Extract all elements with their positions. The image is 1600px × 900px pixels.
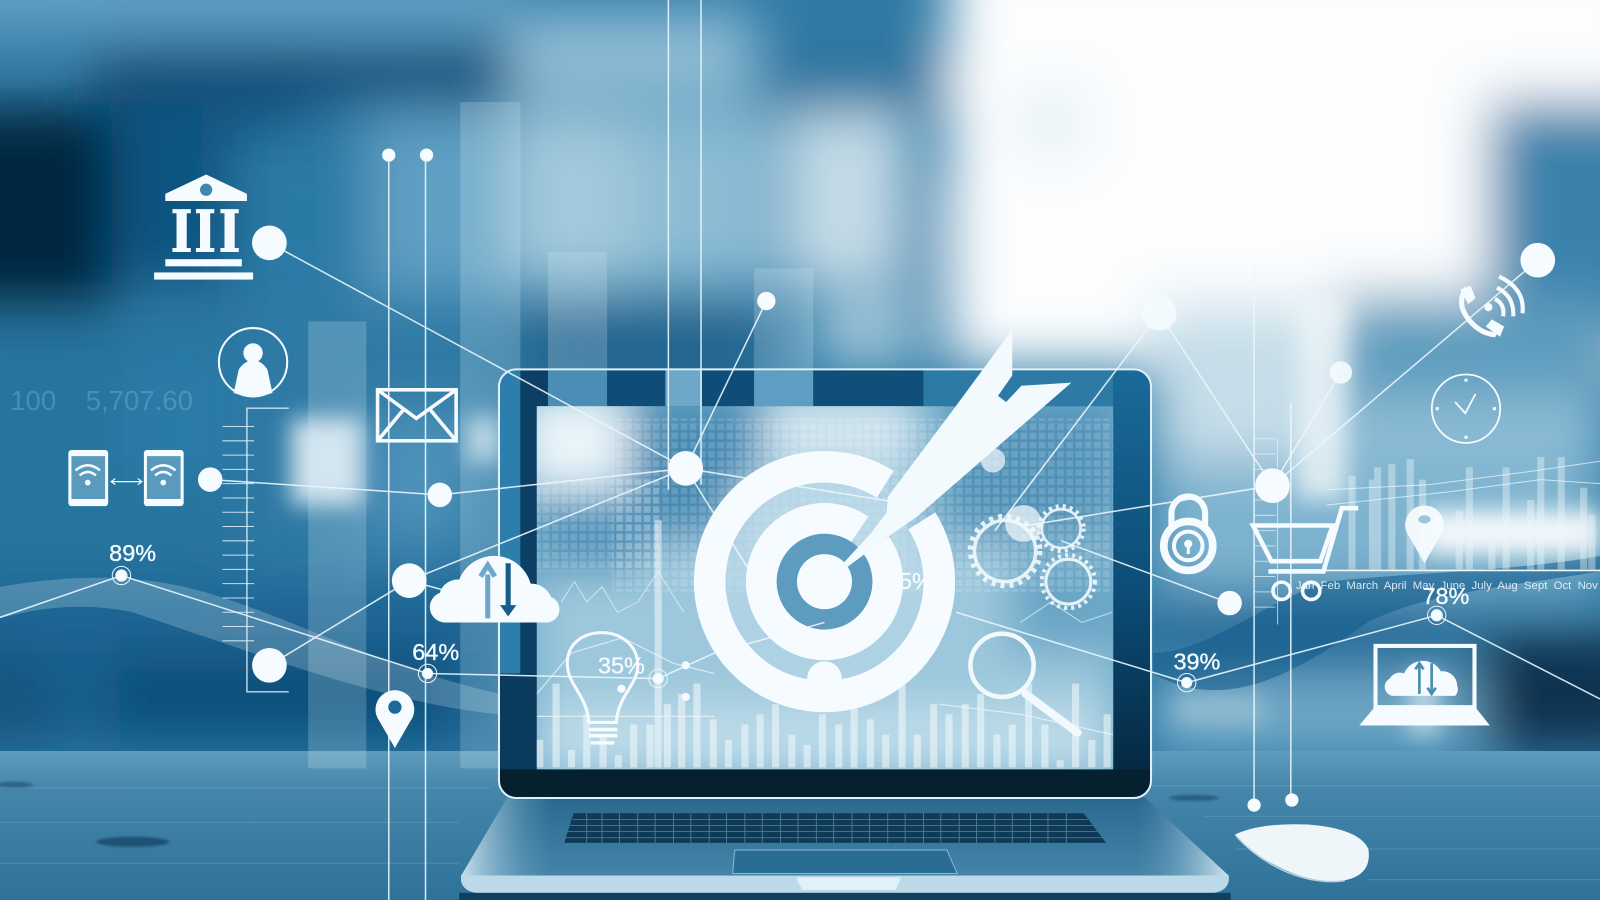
icon: map pin left (376, 690, 414, 748)
icon: cloud transfer (430, 556, 559, 622)
screen line charts (561, 571, 1112, 622)
percent labels: 35% (598, 652, 645, 678)
keyboard (564, 813, 1106, 843)
icon: magnifier (970, 634, 1078, 733)
faint ticker numbers: 5,707.60 (86, 385, 193, 416)
laptop notch (796, 878, 901, 890)
laptop lid and bezel (499, 369, 1151, 798)
target gap shading (726, 483, 923, 681)
percent labels: 64% (412, 639, 459, 665)
ruler scale left (222, 408, 289, 692)
screen bar chart (540, 520, 1107, 767)
icon: shopping cart (1253, 508, 1358, 599)
wave band (0, 556, 1600, 714)
faint ticker numbers: 100 (10, 385, 56, 416)
laptop base (459, 796, 1231, 900)
mouse (1235, 824, 1369, 882)
percent labels (109, 540, 1470, 678)
laptop screen (520, 393, 1113, 776)
icon: bank (154, 174, 253, 280)
icon: laptop with cloud (1359, 646, 1490, 726)
icon: connected phones (68, 450, 184, 506)
percent labels: 5% (899, 568, 933, 594)
right bar chart (1323, 457, 1600, 570)
icon: gears (970, 506, 1095, 608)
faint ticker numbers (10, 385, 193, 416)
percent marker rings (112, 566, 1446, 692)
target rings (710, 467, 939, 696)
dart arrow (823, 330, 1071, 585)
trackpad (733, 850, 957, 873)
right ruler scale (1254, 439, 1278, 624)
icon: envelope (378, 390, 456, 441)
percent labels: 89% (109, 540, 156, 566)
percent labels: 39% (1173, 648, 1221, 674)
wooden desk (0, 751, 1600, 900)
icon: clock (1432, 374, 1500, 443)
node dots (198, 148, 1555, 812)
icon: phone with signal (1460, 277, 1523, 337)
translucent background bars (308, 102, 813, 768)
icon: light bulb (567, 633, 638, 743)
month axis labels: Jan Feb March April May June July Aug Sept Oct Nov (1296, 580, 1598, 592)
percent labels: 78% (1422, 583, 1470, 609)
icon: map pin right (1405, 505, 1444, 563)
icon: person (219, 328, 287, 396)
icon: padlock (1164, 496, 1213, 570)
